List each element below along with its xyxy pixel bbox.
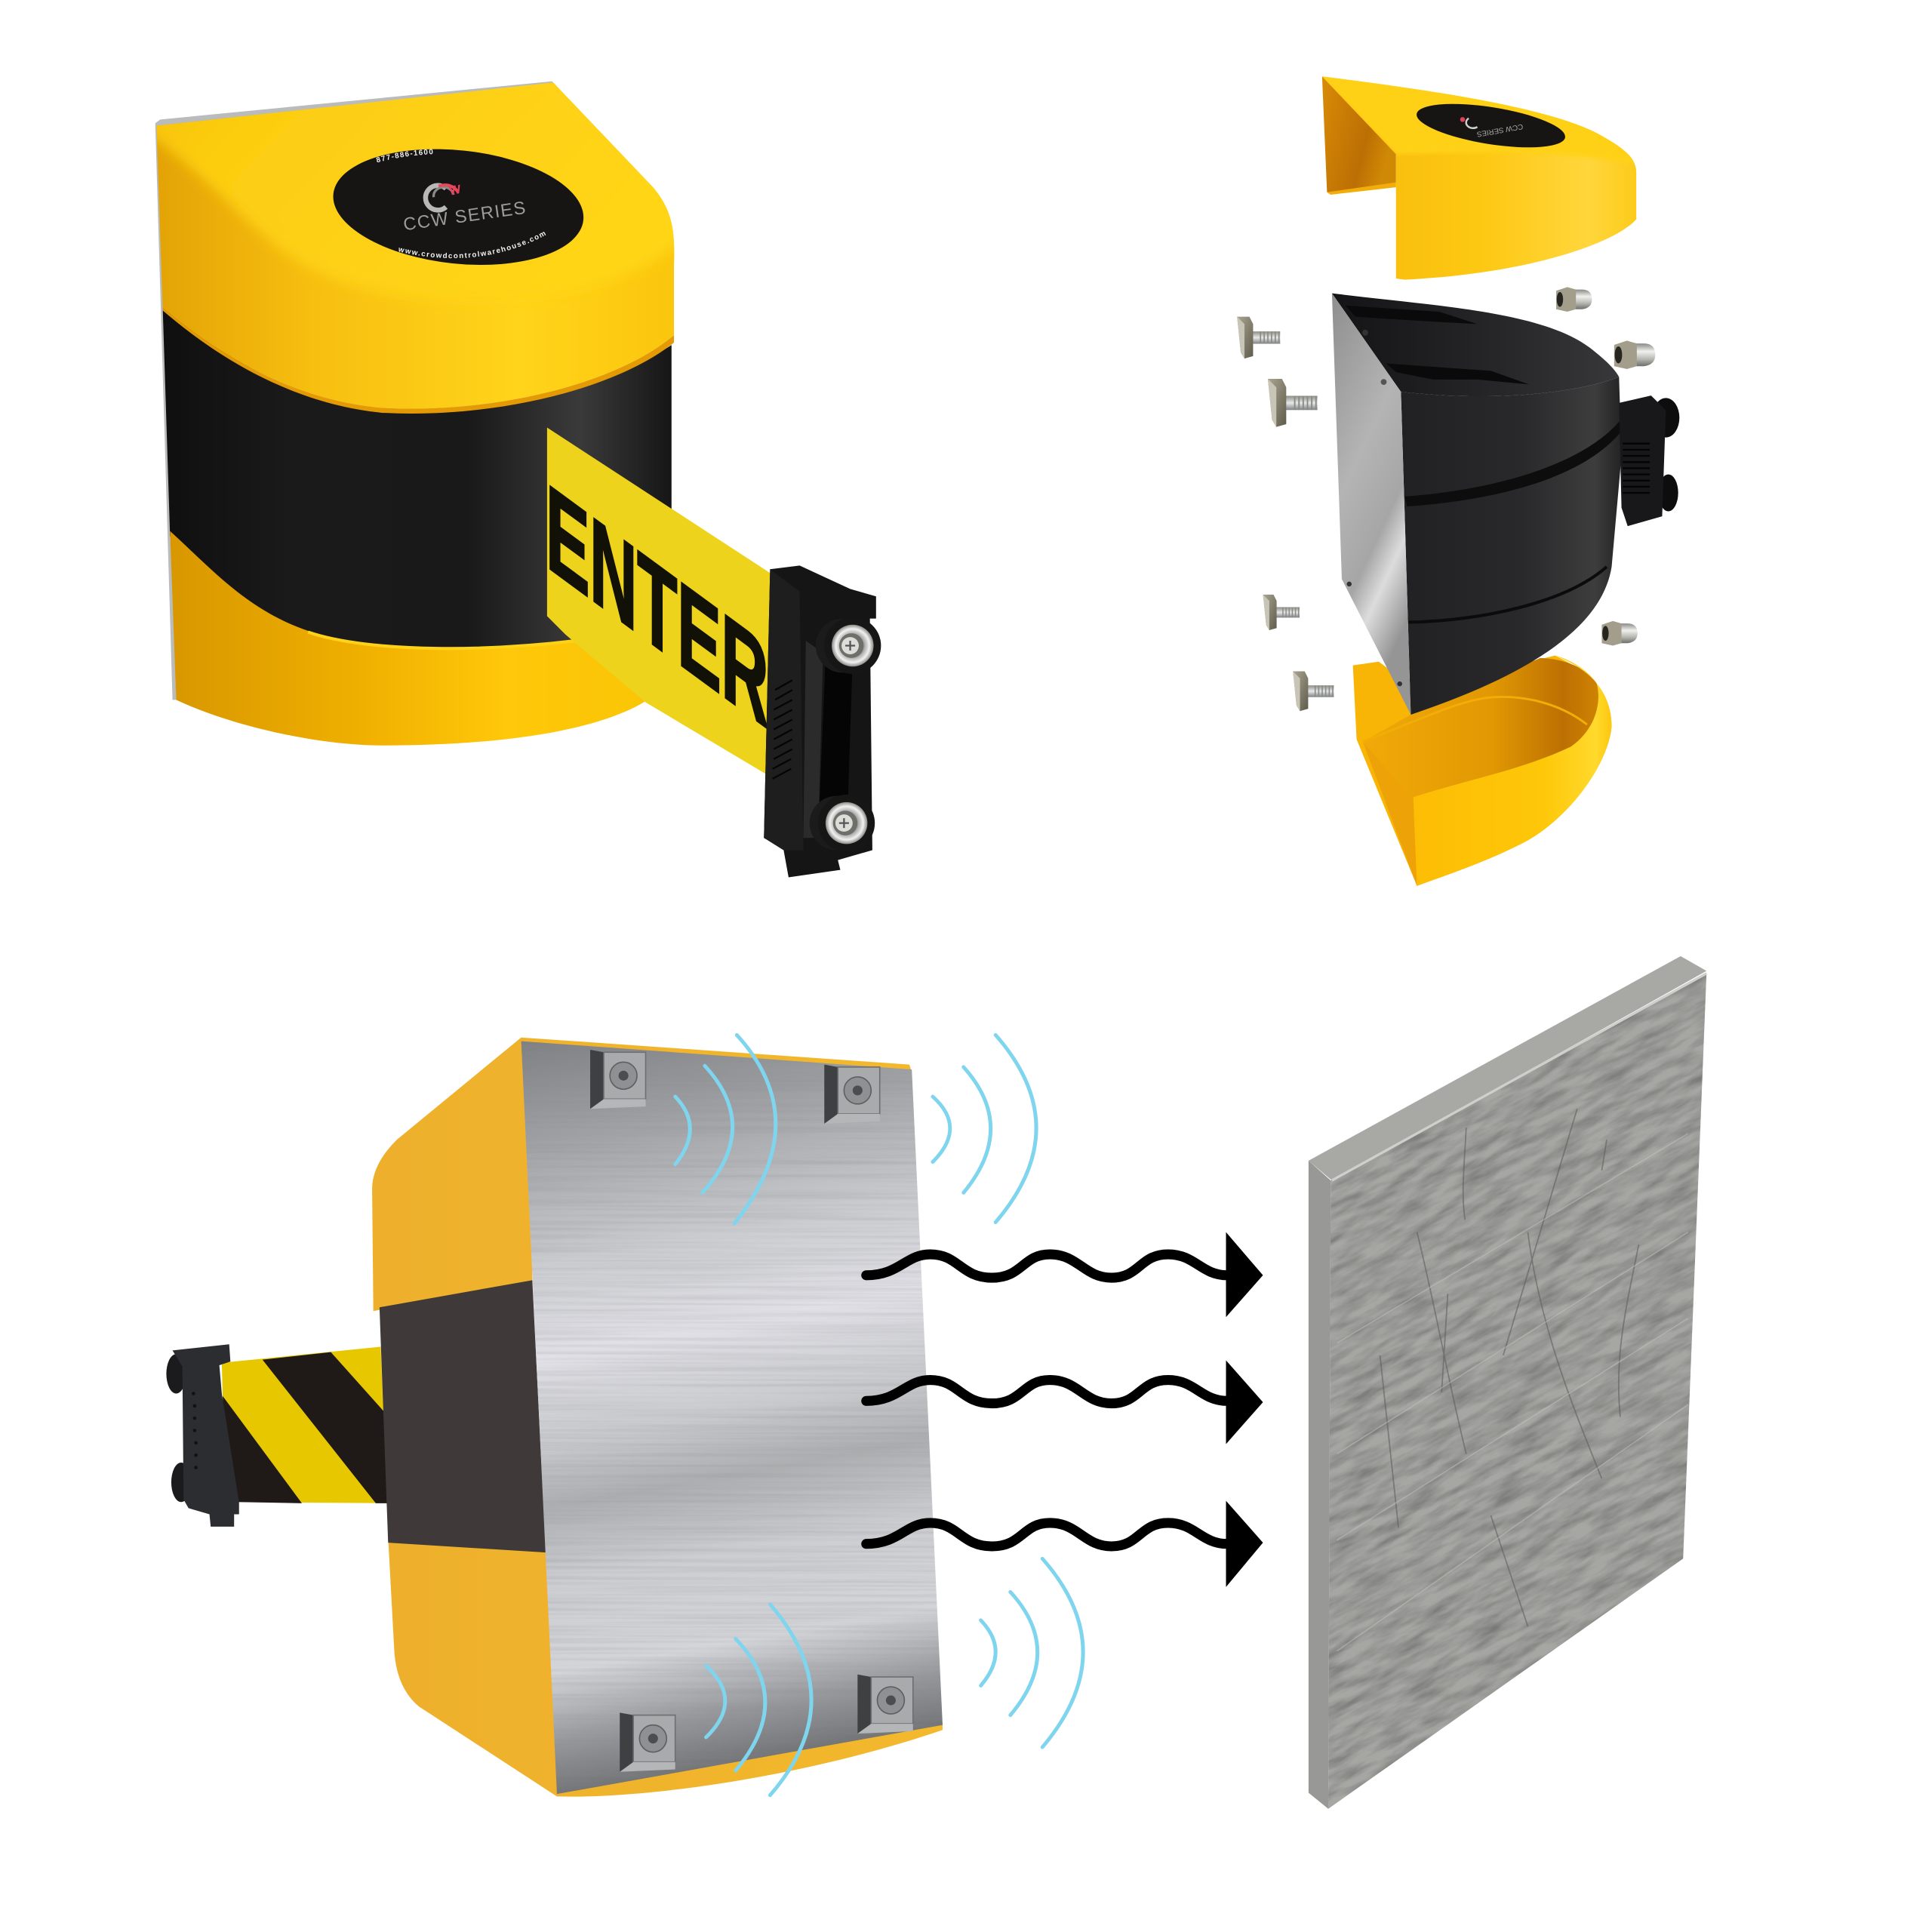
upper magnet xyxy=(816,617,881,674)
mounting bracket top right xyxy=(824,1065,880,1124)
yellow bottom base xyxy=(170,531,653,746)
logo mark: W xyxy=(448,183,462,198)
attraction arrow middle xyxy=(866,1360,1263,1444)
panel: exploded view of the housing xyxy=(1237,62,1679,886)
sticker logo on cap xyxy=(334,149,584,265)
panel: magnetic back of the barrier xyxy=(166,956,1706,1809)
lower magnet xyxy=(810,795,875,851)
tray floor xyxy=(1363,658,1598,797)
yellow ENTER belt xyxy=(546,428,774,779)
T-bolt fastener 2 xyxy=(1268,379,1318,427)
infographic canvas xyxy=(155,76,1707,1809)
sticker phone number: 877-886-1600 xyxy=(376,149,433,162)
belt clip behind drum xyxy=(1619,395,1679,526)
attraction arrow bottom xyxy=(866,1501,1263,1587)
yellow top cap xyxy=(136,74,690,414)
drum seams xyxy=(1404,419,1622,506)
cover sticker xyxy=(1414,96,1568,155)
stainless back plate xyxy=(518,1035,949,1799)
mounting bracket bottom left xyxy=(620,1712,675,1772)
logo mark xyxy=(426,183,462,210)
tray front wall xyxy=(1414,656,1612,886)
wall plate edge xyxy=(155,82,557,700)
cap nut fastener 2 xyxy=(1614,340,1655,369)
panel: assembled retractable belt barrier xyxy=(155,82,881,877)
mounting bracket bottom right xyxy=(857,1675,913,1734)
stainless back plate xyxy=(1332,294,1411,715)
vent hatching xyxy=(773,680,792,779)
lower yellow shell xyxy=(388,1538,943,1797)
sticker web address: www.crowdcontrolwarehouse.com xyxy=(398,232,546,258)
mounting bracket top left xyxy=(590,1050,646,1109)
upper yellow shell xyxy=(372,1038,912,1311)
plate top highlight xyxy=(1332,974,1706,1180)
black inner drum xyxy=(1332,294,1622,715)
T-bolt fastener 3 xyxy=(1263,595,1300,630)
belt end magnetic clip xyxy=(764,565,881,877)
cap nut fastener 1 xyxy=(1556,287,1592,312)
cap nut fastener 3 xyxy=(1601,621,1638,646)
steel wall plate xyxy=(1309,956,1706,1809)
cover sticker: CCW SERIES xyxy=(1475,122,1524,138)
T-bolt fastener 1 xyxy=(1237,317,1280,358)
belt lettering: ENTER xyxy=(546,457,768,755)
bottom yellow tray xyxy=(1353,656,1612,886)
magnetic field arcs xyxy=(675,1035,1083,1795)
black middle of housing xyxy=(380,1280,546,1552)
black belt housing band xyxy=(163,306,672,652)
sticker model name: CCW SERIES xyxy=(402,198,528,235)
T-bolt fastener 4 xyxy=(1293,672,1334,711)
belt with hazard stripes xyxy=(222,1346,387,1503)
top face grooves xyxy=(1346,306,1529,384)
top yellow cover xyxy=(1322,76,1636,280)
attraction arrow top xyxy=(866,1232,1263,1317)
belt clip xyxy=(166,1344,239,1527)
